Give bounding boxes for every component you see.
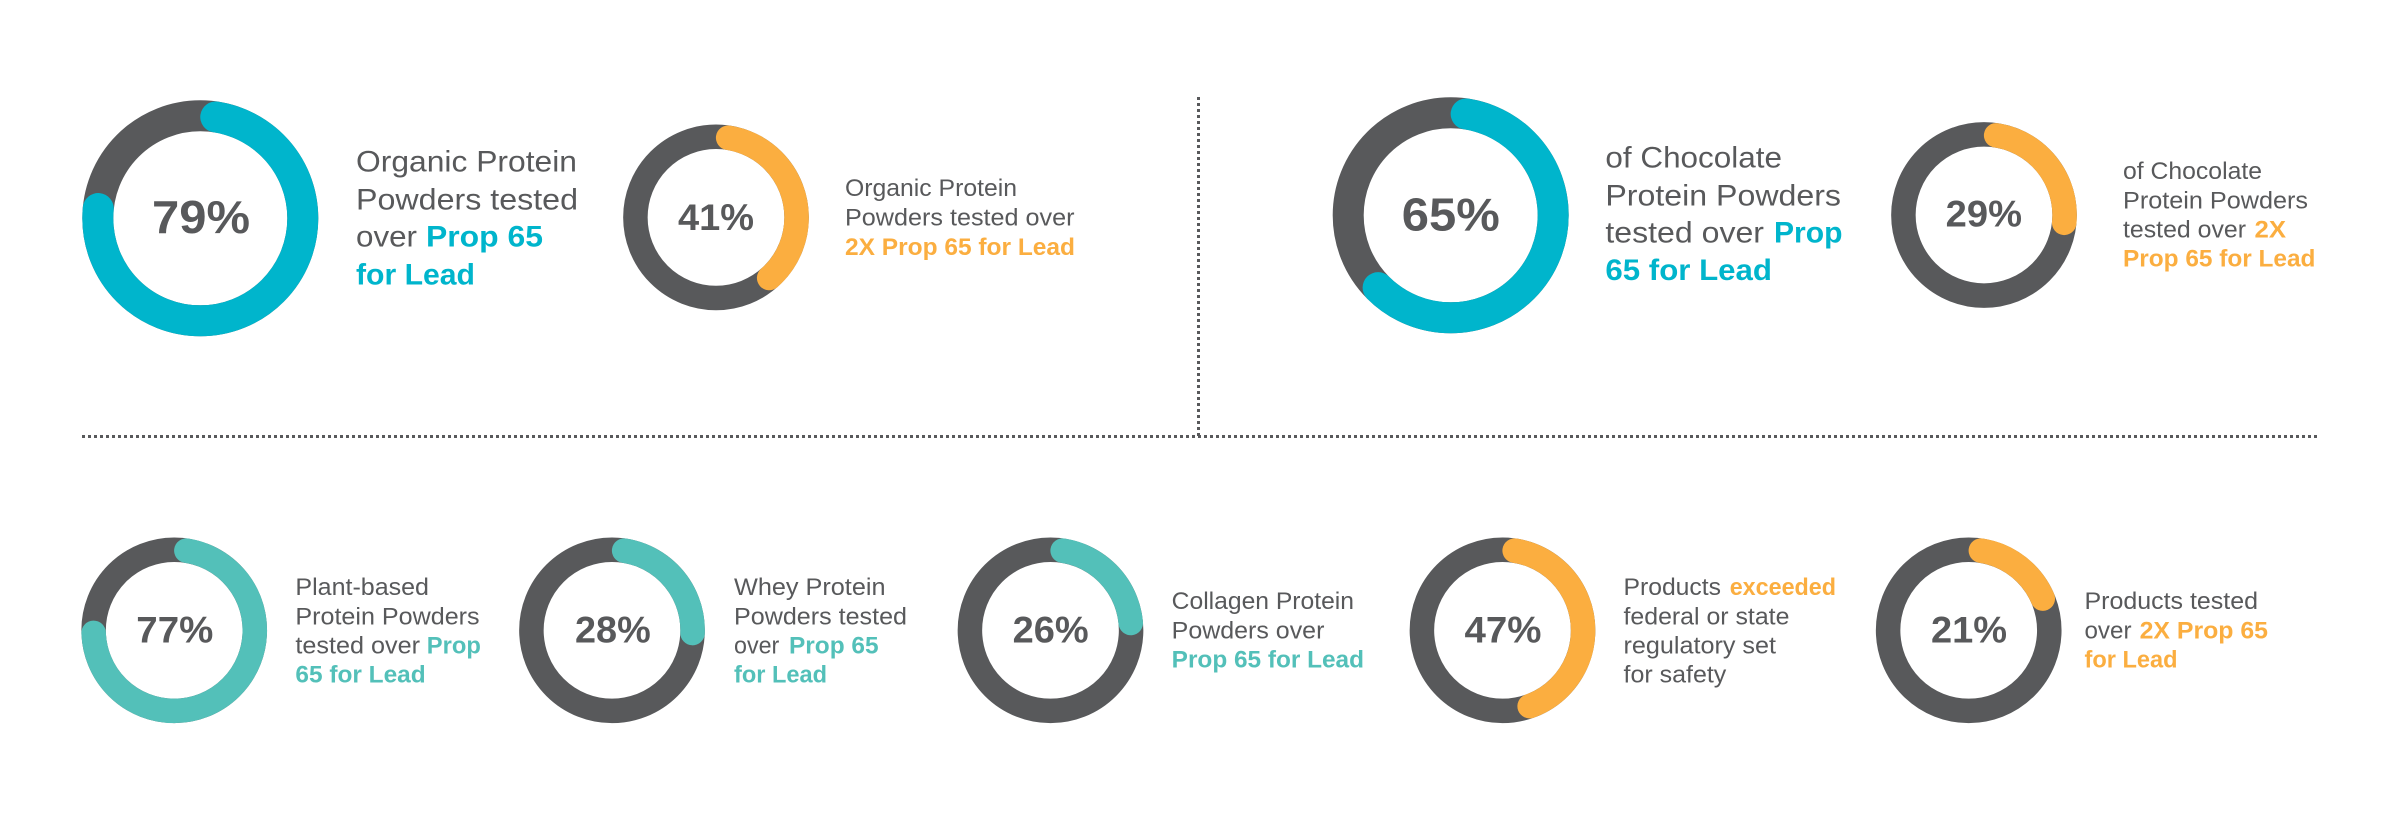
panel: whey, 28% [531,550,907,711]
text: whey protein powders [734,574,907,689]
text: products exceeded limits: regulatory set [1624,632,1776,659]
text: products tested over 2X Prop 65: over [2084,617,2132,644]
text: chocolate protein powders over 2X Prop 65: 2X [2254,217,2286,244]
donut chart: 29%: 29% [1946,194,2022,235]
text: chocolate protein powders over Prop 65: 65 for Lead [1605,254,1772,287]
text: organic protein powders over 2X Prop 65: Organic Protein [845,175,1017,202]
text: plant-based protein powders: tested over [295,632,420,659]
text: chocolate protein powders over Prop 65 [1605,142,1842,287]
text: chocolate protein powders over 2X Prop 65: Protein Powders [2123,188,2308,215]
donut chart: 41% [635,137,797,298]
text: products exceeded limits: for safety [1624,662,1726,689]
donut chart: 79%: 79% [152,191,250,243]
donut chart: 65% [1348,113,1553,318]
text: chocolate protein powders over 2X Prop 65: tested over [2123,217,2246,244]
donut chart: 47%: 47% [1464,610,1542,651]
text: collagen protein powders: Powders over [1172,617,1324,644]
text: whey protein powders: Powders tested [734,603,907,630]
text: collagen protein powders: Prop 65 for Lead [1172,646,1364,673]
text: organic protein powders over 2X Prop 65 [845,175,1075,261]
text: products tested over 2X Prop 65 [2084,588,2268,673]
text: chocolate protein powders over Prop 65: Prop [1774,217,1842,250]
text: organic protein powders over Prop 65: over [356,221,417,254]
panel: organic over Prop 65, 79% [98,116,578,321]
text: organic protein powders over Prop 65 [356,146,578,291]
text: organic protein powders over 2X Prop 65: 2X Prop 65 for Lead [845,234,1075,261]
donut chart: 79% [98,116,303,321]
vertical dotted divider [1197,97,1200,436]
donut chart: 41%: 41% [678,197,754,238]
text: products tested over 2X Prop 65: 2X Prop 65 [2140,617,2268,644]
text: products exceeded limits: federal or state [1624,603,1789,630]
text: products exceeded limits [1624,574,1836,689]
donut chart: 21% [1888,550,2049,711]
text: products exceeded limits: Products [1624,574,1721,601]
donut chart: 77%: 77% [136,610,213,651]
text: organic protein powders over Prop 65: Prop 65 [426,221,543,254]
panel: products over 2X Prop 65, 21% [1888,550,2268,711]
text: chocolate protein powders over Prop 65: of Chocolate [1605,142,1782,175]
text: products tested over 2X Prop 65: Products tested [2084,588,2258,615]
text: chocolate protein powders over 2X Prop 65 [2123,158,2315,273]
text: plant-based protein powders [295,574,481,689]
panel: chocolate over 2X Prop 65, 29% [1903,134,2315,296]
text: chocolate protein powders over Prop 65: tested over [1605,217,1764,250]
text: organic protein powders over 2X Prop 65: Powders tested over [845,205,1075,232]
text: collagen protein powders: Collagen Protein [1172,588,1354,615]
panel: plant-based, 77% [94,550,481,711]
donut chart: 47% [1422,550,1583,711]
donut chart: 26% [970,550,1131,711]
text: whey protein powders: over [734,632,779,659]
panel: chocolate over Prop 65, 65% [1348,113,1842,318]
text: chocolate protein powders over Prop 65: Protein Powders [1605,179,1841,212]
donut chart: 28%: 28% [575,610,651,651]
text: whey protein powders: Whey Protein [734,574,886,601]
donut chart: 29% [1903,134,2065,296]
donut chart: 77% [94,550,255,711]
text: chocolate protein powders over 2X Prop 65: Prop 65 for Lead [2123,246,2315,273]
donut chart: 26%: 26% [1013,610,1089,651]
donut chart: 28% [531,550,693,711]
text: organic protein powders over Prop 65: Powders tested [356,183,578,216]
text: organic protein powders over Prop 65: Organic Protein [356,146,577,179]
text: whey protein powders: Prop 65 [789,632,879,659]
panel: products exceeded federal or state, 47% [1422,550,1836,711]
text: chocolate protein powders over 2X Prop 65: of Chocolate [2123,158,2262,185]
donut chart: 65%: 65% [1402,189,1500,241]
text: whey protein powders: for Lead [734,662,827,689]
text: organic protein powders over Prop 65: for Lead [356,258,475,291]
horizontal dotted divider [82,435,2318,438]
donut chart: 21%: 21% [1931,610,2007,651]
text: plant-based protein powders: Protein Powders [295,603,480,630]
text: plant-based protein powders: Prop [427,632,481,659]
text: plant-based protein powders: Plant-based [295,574,429,601]
text: plant-based protein powders: 65 for Lead [295,662,426,689]
text: products exceeded limits: exceeded [1730,574,1836,601]
panel: collagen, 26% [970,550,1364,711]
panel: organic over 2X Prop 65, 41% [635,137,1075,298]
text: collagen protein powders [1172,588,1364,673]
text: products tested over 2X Prop 65: for Lead [2084,646,2178,673]
